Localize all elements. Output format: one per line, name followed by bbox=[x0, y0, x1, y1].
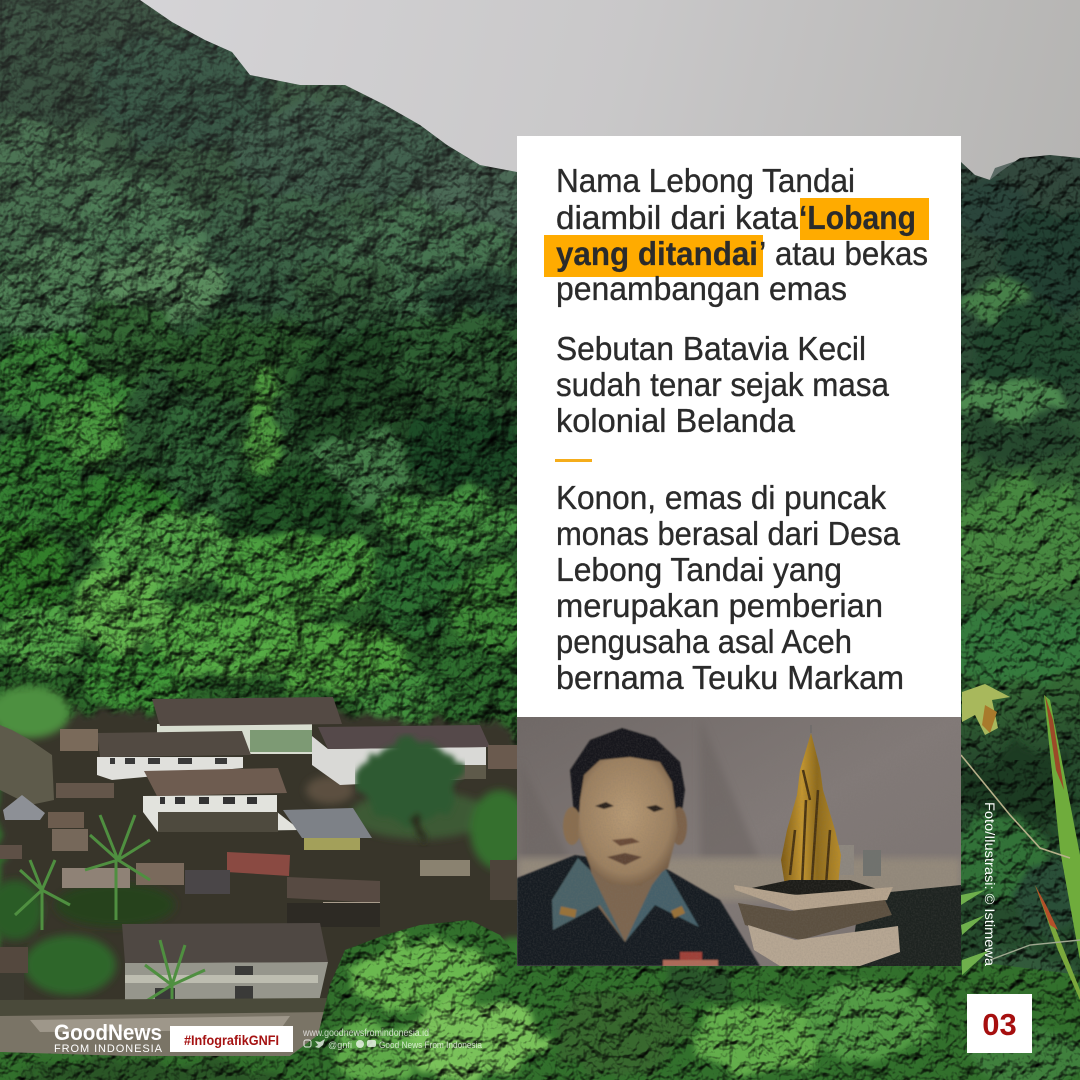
ground strip bbox=[0, 1006, 345, 1062]
text block: paragraph one bbox=[556, 162, 928, 307]
portrait: collar bbox=[552, 858, 699, 942]
monument: flame bbox=[781, 725, 841, 893]
row of wood shacks bbox=[62, 745, 517, 927]
text block: paragraph one: diambil dari kata bbox=[556, 199, 799, 236]
text block: paragraph one: yang ditandai bbox=[556, 235, 758, 272]
portrait: ears and face bbox=[563, 757, 687, 886]
background: distant ridge right bbox=[985, 155, 1080, 200]
panel: photo of Teuku Markam and Monas flame bbox=[517, 717, 961, 966]
icon: grass blades bbox=[961, 695, 1080, 1000]
text block: paragraph three bbox=[556, 479, 904, 696]
logo: GoodNews from Indonesia: FROM INDONESIA bbox=[54, 1043, 163, 1055]
highlight: second line bbox=[544, 235, 763, 277]
text block: paragraph one: penambangan emas bbox=[556, 270, 847, 307]
highlight: first line bbox=[800, 198, 929, 240]
text block: paragraph two bbox=[556, 330, 890, 439]
portrait: hair bbox=[570, 728, 685, 825]
house A bbox=[152, 697, 342, 754]
small shacks left bbox=[0, 729, 114, 859]
bottom house bbox=[122, 923, 328, 1006]
central tree bbox=[360, 738, 460, 842]
city skyline bbox=[517, 845, 961, 966]
text block: paragraph one: ‘Lobang bbox=[799, 199, 916, 236]
portrait: uniform bbox=[517, 855, 760, 966]
text block: paragraph one: Nama Lebong Tandai bbox=[556, 162, 855, 199]
small house far left bbox=[0, 947, 28, 1009]
footer social links bbox=[302, 1028, 483, 1051]
photo credit: Foto/Ilustrasi: © Istimewa bbox=[982, 802, 997, 967]
logo: GoodNews from Indonesia: GoodNews bbox=[54, 1020, 162, 1045]
background: forested hillside left bbox=[0, 0, 550, 1080]
text block: paragraph one: ’ bbox=[759, 235, 766, 272]
portrait: medal ribbons bbox=[663, 952, 718, 966]
text block: paragraph three: merupakan pemberian bbox=[556, 587, 883, 624]
text block: paragraph two: kolonial Belanda bbox=[556, 402, 796, 439]
icon: twitter bbox=[315, 1039, 325, 1048]
house C bbox=[312, 725, 490, 785]
icon: youtube bbox=[367, 1040, 376, 1047]
portrait: neck bbox=[588, 855, 668, 942]
red roof bbox=[227, 852, 290, 876]
hashtag badge bbox=[170, 1026, 293, 1052]
panel: text card bbox=[517, 136, 961, 717]
footer social links: www.goodnewsfromindonesia.id bbox=[302, 1028, 429, 1039]
icon: facebook bbox=[356, 1040, 364, 1048]
background: forested hillside right bbox=[961, 155, 1080, 760]
text block: paragraph two: Sebutan Batavia Kecil bbox=[556, 330, 866, 367]
house B bbox=[97, 731, 251, 780]
village ground bbox=[0, 712, 530, 1015]
hashtag badge: #InfografikGNFI bbox=[184, 1032, 279, 1048]
background: village bbox=[0, 686, 530, 1062]
text block: paragraph two: sudah tenar sejak masa bbox=[556, 366, 890, 403]
rock cliff bbox=[0, 725, 54, 805]
text block: paragraph one: atau bekas bbox=[775, 235, 928, 272]
text block: paragraph three: monas berasal dari Desa bbox=[556, 515, 901, 552]
page number badge bbox=[967, 994, 1032, 1053]
background: lower right dark foliage bbox=[950, 750, 1080, 1080]
background: foreground foliage bbox=[0, 915, 1080, 1080]
page number badge: 03 bbox=[982, 1007, 1017, 1042]
footer social links: @gnfi bbox=[328, 1040, 352, 1050]
tin roof building bbox=[283, 808, 372, 850]
logo: GoodNews from Indonesia bbox=[54, 1020, 163, 1055]
footer social links: Good News From Indonesia bbox=[379, 1040, 483, 1051]
icon: instagram bbox=[304, 1040, 311, 1047]
text block: paragraph three: Konon, emas di puncak bbox=[556, 479, 886, 516]
text block: paragraph three: bernama Teuku Markam bbox=[556, 659, 904, 696]
village greenery bbox=[0, 686, 530, 995]
text block: paragraph three: pengusaha asal Aceh bbox=[556, 623, 852, 660]
palm trees bbox=[15, 815, 205, 1020]
text block: paragraph three: Lebong Tandai yang bbox=[556, 551, 842, 588]
house D bbox=[143, 768, 300, 832]
icon: leaves upper right bbox=[961, 684, 1010, 975]
monument: platform bbox=[734, 880, 900, 966]
